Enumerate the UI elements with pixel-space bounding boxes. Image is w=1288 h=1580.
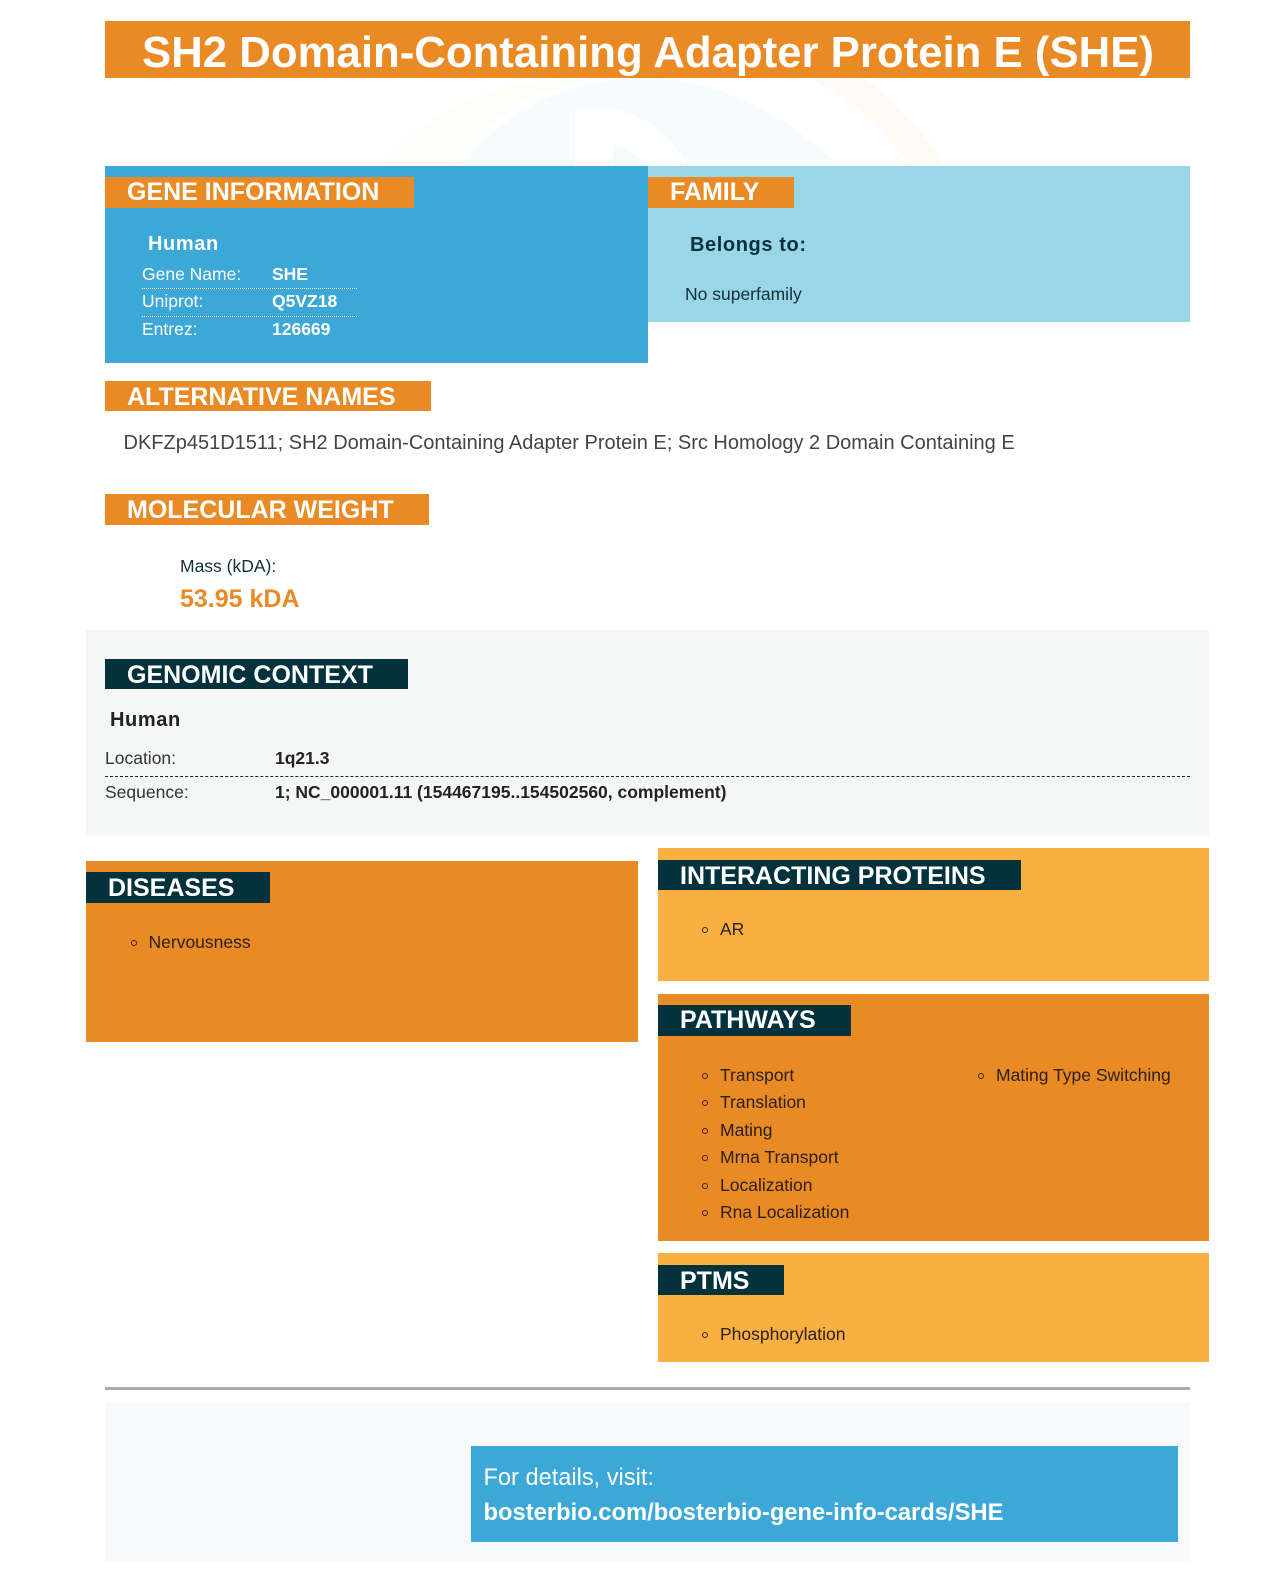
callout: details link	[471, 1446, 1178, 1542]
title text: SH2 Domain-Containing Adapter Protein E (SHE)	[142, 28, 1154, 77]
callout url: bosterbio.com/bosterbio-gene-info-cards/SHE	[484, 1499, 1003, 1526]
heading: gene information: GENE INFORMATION	[127, 178, 379, 206]
panel: diseases	[86, 861, 638, 1042]
species label: Human	[110, 709, 181, 731]
panel: pathways	[658, 994, 1209, 1241]
location row: 1q21.3	[275, 748, 329, 768]
ptm item: Phosphorylation	[720, 1324, 846, 1344]
panel: gene information	[105, 166, 648, 363]
panel: footer	[105, 1402, 1190, 1561]
entrez row	[142, 319, 330, 339]
sequence label and value	[105, 782, 726, 802]
heading: pathways: PATHWAYS	[680, 1006, 816, 1034]
pathway item: Mating Type Switching	[996, 1065, 1171, 1085]
heading: diseases: DISEASES	[108, 874, 234, 902]
heading: family	[648, 177, 794, 208]
protein item	[702, 919, 744, 939]
mass value: 53.95 kDA	[180, 585, 300, 613]
panel: interacting proteins	[658, 848, 1209, 981]
pathway item: Localization	[720, 1175, 812, 1195]
sequence row: 1; NC_000001.11 (154467195..154502560, complement)	[275, 782, 726, 802]
heading: family: FAMILY	[670, 178, 759, 206]
heading: molecular weight: MOLECULAR WEIGHT	[127, 496, 394, 524]
pathway item: Translation	[720, 1092, 806, 1112]
pathway item: Transport	[720, 1065, 794, 1085]
alternative names text: DKFZp451D1511; SH2 Domain-Containing Adapter Protein E; Src Homology 2 Domain Containing E	[124, 432, 1015, 454]
uniprot label and value	[142, 291, 337, 311]
family value: No superfamily	[685, 284, 802, 304]
mass label: Mass (kDA):	[180, 556, 276, 576]
belongs to label: Belongs to:	[690, 234, 807, 256]
location label and value	[105, 748, 329, 768]
uniprot row	[142, 289, 357, 317]
pathway item: Rna Localization	[720, 1202, 849, 1222]
callout label: For details, visit:	[484, 1465, 654, 1491]
panel: ptms	[658, 1253, 1209, 1362]
location row	[105, 743, 1190, 777]
heading: ptms	[658, 1265, 784, 1295]
pathway item: Mrna Transport	[720, 1147, 839, 1167]
entrez label and value	[142, 319, 330, 339]
heading: alternative names: ALTERNATIVE NAMES	[127, 383, 396, 411]
gene name row	[142, 261, 357, 289]
location label and value: Location:	[105, 748, 176, 768]
gene name label and value: Gene Name:	[142, 264, 241, 284]
background watermark logo	[462, 78, 944, 166]
panel: family	[648, 166, 1190, 322]
heading: genomic context: GENOMIC CONTEXT	[127, 661, 373, 689]
protein item: AR	[720, 919, 744, 939]
heading: interacting proteins: INTERACTING PROTEINS	[680, 862, 986, 890]
heading: diseases	[86, 872, 270, 903]
panel: genomic context	[86, 630, 1209, 836]
species label: Human	[148, 233, 219, 255]
sequence label and value: Sequence:	[105, 782, 189, 802]
title banner	[105, 21, 1190, 78]
gene name label and value	[142, 264, 308, 284]
entrez label and value: Entrez:	[142, 319, 197, 339]
pathway item: Mating	[720, 1120, 773, 1140]
uniprot row: Q5VZ18	[272, 291, 337, 311]
heading: ptms: PTMS	[680, 1267, 749, 1295]
uniprot label and value: Uniprot:	[142, 291, 203, 311]
gene name row: SHE	[272, 264, 308, 284]
entrez row: 126669	[272, 319, 330, 339]
heading: pathways	[658, 1005, 851, 1036]
disease item: Nervousness	[148, 932, 251, 952]
